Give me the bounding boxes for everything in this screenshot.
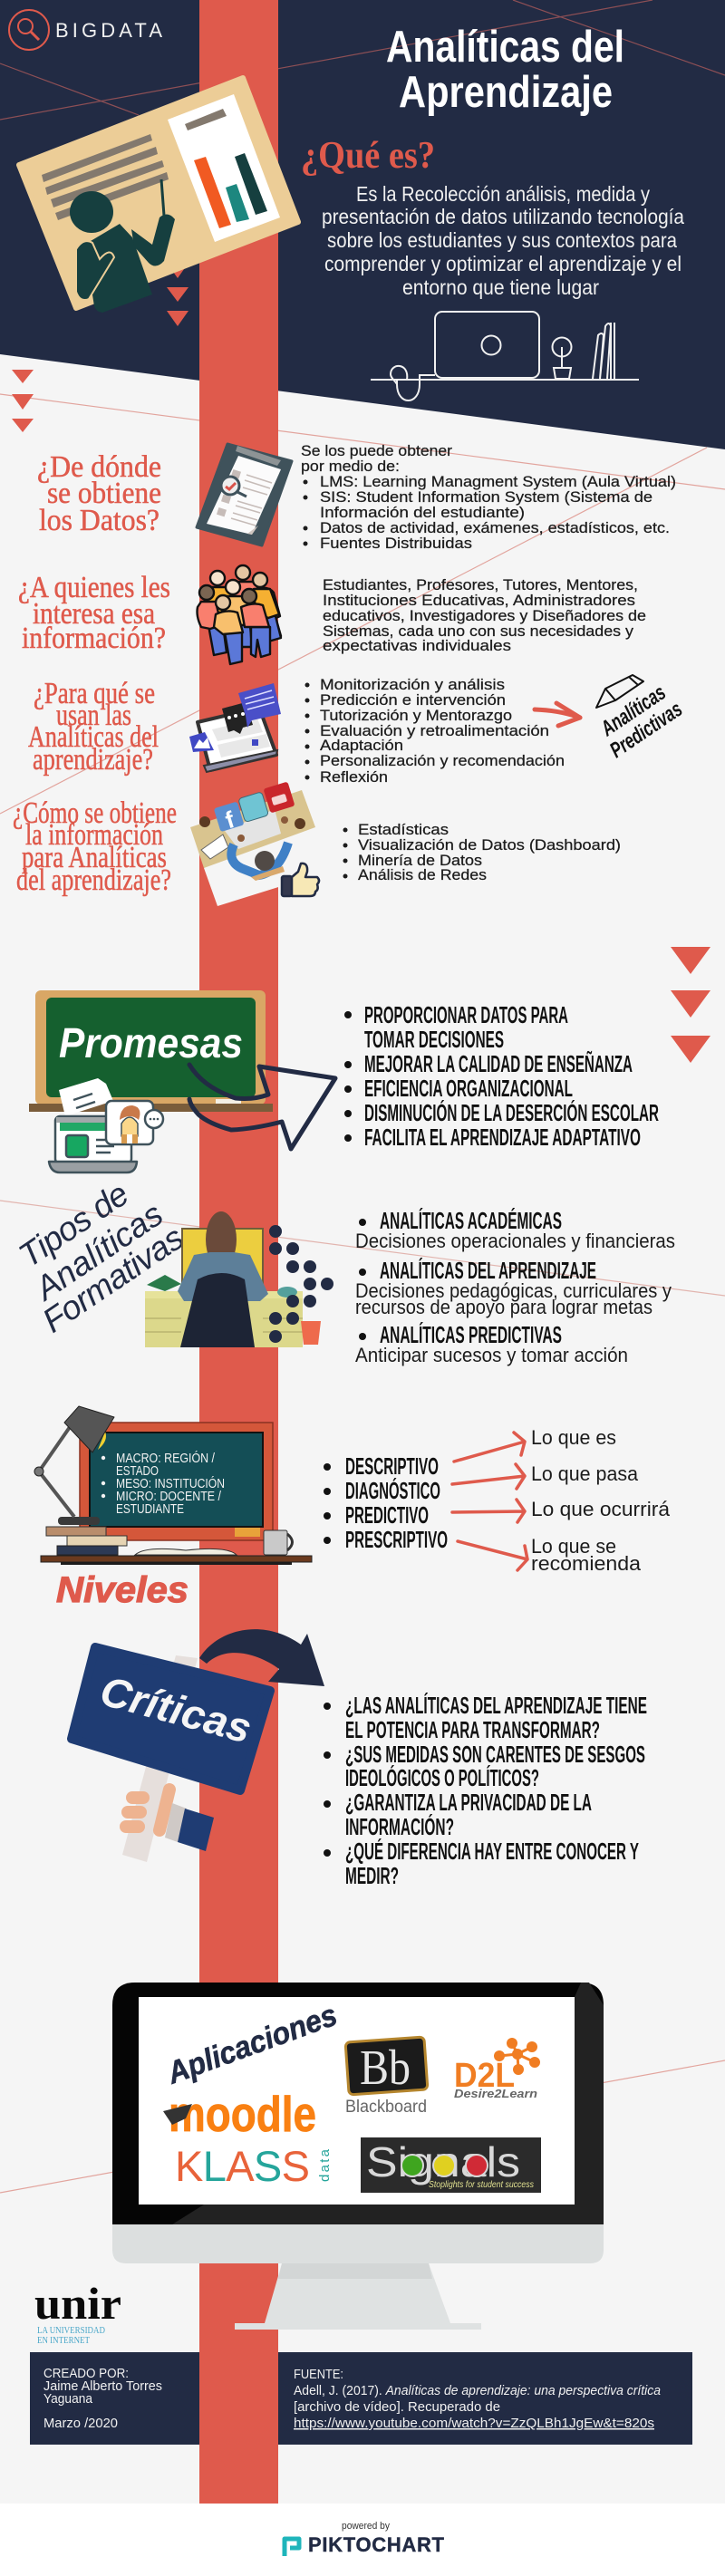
text: interested audiences bbox=[323, 576, 646, 654]
logo: KLASS data: KLASS bbox=[175, 2142, 310, 2190]
logo: D2L bbox=[454, 2038, 540, 2100]
footer: powered by Piktochart: powered by bbox=[342, 2521, 390, 2532]
panel: Promesas chalkboard bbox=[29, 990, 273, 1112]
icon: clipboard bbox=[197, 444, 292, 545]
text: levels: ESTUDIANTE bbox=[116, 1501, 184, 1517]
text: definition: comprender y optimizar el aprendizaje y el bbox=[324, 252, 682, 275]
panel: source citation: [archivo de vídeo]. Recuperado de bbox=[294, 2399, 500, 2415]
logo: D2L: Desire2Learn bbox=[454, 2087, 537, 2100]
list: analytics types: ANALÍTICAS ACADÉMICAS bbox=[380, 1207, 562, 1234]
triangles on navy bbox=[167, 263, 188, 326]
list: promises bbox=[344, 1001, 659, 1151]
text: sources of data bbox=[301, 442, 676, 552]
logo: UNIR: EN INTERNET bbox=[37, 2335, 90, 2346]
logo: KLASS data: data bbox=[317, 2148, 333, 2182]
list: analytics types: recursos de apoyo para lograr metas bbox=[355, 1296, 652, 1318]
text: methods bbox=[343, 821, 621, 883]
heading: ¿De dónde se obtiene los Datos?: los Datos? bbox=[39, 504, 160, 537]
heading: ¿Cómo se obtiene la información?: del aprendizaje? bbox=[16, 863, 171, 897]
logo: Blackboard bbox=[345, 2037, 428, 2117]
icon: laptop and teacher card bbox=[49, 1078, 163, 1172]
panel: source citation: https://www.youtube.com/watch?v=ZzQLBh1JgEw&t=820s bbox=[294, 2416, 654, 2431]
text: uses of analytics: Predicción e intervención bbox=[320, 691, 506, 709]
panel: author credits: Jaime Alberto Torres bbox=[44, 2378, 162, 2394]
list: promises: TOMAR DECISIONES bbox=[364, 1026, 504, 1053]
logo: UNIR: LA UNIVERSIDAD bbox=[37, 2325, 105, 2336]
text: definition bbox=[322, 182, 684, 299]
text: levels bbox=[102, 1451, 225, 1517]
heading: ¿Para qué se usan las Analíticas del aprendizaje?: aprendizaje? bbox=[33, 743, 153, 777]
heading: Aplicaciones: Aplicaciones bbox=[162, 1998, 342, 2091]
logo: moodle: moodle bbox=[169, 2086, 316, 2142]
logo: UNIR: unir bbox=[34, 2278, 121, 2329]
list: analytic levels: DIAGNÓSTICO bbox=[345, 1477, 440, 1504]
icon: pencil bbox=[596, 675, 643, 708]
text: definition: Es la Recolección análisis, medida y bbox=[356, 182, 650, 206]
arrow: to predictive analytics bbox=[535, 703, 580, 726]
icon: line-art desk with laptop bbox=[371, 312, 639, 400]
text: uses of analytics: Tutorización y Mentorazgo bbox=[320, 707, 512, 724]
panel: source citation: Adell, J. (2017). Analíticas de aprendizaje: una perspectiva crítica bbox=[294, 2383, 661, 2398]
list: analytics types bbox=[355, 1207, 675, 1366]
icon: laptop with chat bubbles bbox=[189, 683, 281, 772]
panel: source citation: FUENTE: bbox=[294, 2367, 343, 2382]
text: level outcomes: Lo que se bbox=[531, 1535, 616, 1558]
text: sources of data: Se los puede obtener bbox=[301, 442, 452, 459]
footer: powered by Piktochart bbox=[285, 2521, 445, 2556]
heading: Críticas: Críticas bbox=[95, 1666, 256, 1752]
text: level outcomes: recomienda bbox=[531, 1552, 642, 1575]
panel: author credits: Marzo /2020 bbox=[44, 2416, 118, 2431]
illustration: Niveles blackboard on shelf bbox=[34, 1406, 312, 1565]
list: critical questions bbox=[324, 1692, 647, 1889]
panel: author credits: CREADO POR: bbox=[44, 2366, 129, 2381]
list: analytic levels bbox=[324, 1452, 448, 1553]
list: critical questions: INFORMACIÓN? bbox=[345, 1813, 454, 1840]
text: level outcomes bbox=[531, 1426, 671, 1575]
list: critical questions: MEDIR? bbox=[345, 1862, 399, 1889]
text: level outcomes: Lo que pasa bbox=[531, 1462, 639, 1485]
list: analytics types: Decisiones operacionales y financieras bbox=[355, 1230, 675, 1252]
text: uses of analytics: Adaptación bbox=[320, 737, 403, 754]
heading: Tipos de Analíticas Formativas: Formativas bbox=[36, 1219, 190, 1340]
title bbox=[386, 23, 624, 117]
text: levels: MICRO: DOCENTE / bbox=[116, 1489, 222, 1504]
text: levels: MESO: INSTITUCIÓN bbox=[116, 1476, 225, 1491]
list: analytic levels: DESCRIPTIVO bbox=[345, 1452, 439, 1480]
label: Analíticas Predictivas: Predictivas bbox=[605, 697, 687, 763]
title: Aprendizaje bbox=[399, 68, 613, 117]
text: sources of data: Datos de actividad, exámenes, estadísticos, etc. bbox=[320, 519, 670, 536]
heading: ¿De dónde se obtiene los Datos?: ¿De dónde bbox=[37, 450, 161, 484]
text: levels: ESTADO bbox=[116, 1463, 159, 1479]
text: definition: sobre los estudiantes y sus contextos para bbox=[327, 228, 677, 252]
logo: Signals: Stoplights for student success bbox=[429, 2180, 534, 2190]
panel: source citation bbox=[278, 2352, 692, 2445]
panel: author credits bbox=[30, 2352, 199, 2445]
text: uses of analytics: Personalización y recomendación bbox=[320, 752, 565, 769]
logo: Signals bbox=[361, 2137, 541, 2193]
text: uses of analytics: Evaluación y retroalimentación bbox=[320, 722, 549, 739]
text: levels: MACRO: REGIÓN / bbox=[116, 1451, 216, 1466]
illustration: presenter with board bbox=[19, 78, 298, 313]
text: definition: entorno que tiene lugar bbox=[402, 275, 599, 299]
triangles on light bbox=[12, 370, 34, 432]
footer: powered by Piktochart: PIKTOCHART bbox=[308, 2533, 445, 2556]
text: level outcomes: Lo que es bbox=[531, 1426, 616, 1449]
heading: ¿De dónde se obtiene los Datos?: se obtiene bbox=[47, 477, 161, 510]
heading: ¿Para qué se usan las Analíticas del aprendizaje? bbox=[28, 677, 159, 777]
text: methods: Visualización de Datos (Dashboard) bbox=[358, 836, 621, 854]
text: sources of data: por medio de: bbox=[301, 458, 400, 475]
triangles right bbox=[671, 947, 710, 1063]
heading: ¿A quienes les interesa esa información?: interesa esa bbox=[33, 597, 155, 631]
heading: Tipos de Analíticas Formativas: Analíticas bbox=[27, 1195, 169, 1308]
text: interested audiences: expectativas individuales bbox=[323, 637, 511, 654]
text: definition: presentación de datos utilizando tecnología bbox=[322, 205, 684, 228]
list: analytics types: ANALÍTICAS PREDICTIVAS bbox=[380, 1321, 562, 1348]
arrows: level to outcome bbox=[452, 1433, 527, 1570]
heading: ¿Cómo se obtiene la información?: para Analíticas bbox=[22, 841, 167, 874]
heading: ¿Cómo se obtiene la información? bbox=[13, 796, 177, 897]
logo: D2L: D2L bbox=[454, 2057, 515, 2095]
logo: Signals: Signals bbox=[366, 2138, 520, 2185]
logo: bigdata bbox=[9, 10, 162, 50]
text: uses of analytics bbox=[304, 676, 565, 786]
label: Analíticas Predictivas bbox=[596, 680, 687, 763]
list: critical questions: IDEOLÓGICOS O POLÍTICOS? bbox=[345, 1764, 539, 1791]
text: interested audiences: Sistemas, cada uno con sus necesidades y bbox=[323, 622, 634, 640]
text: uses of analytics: Monitorización y análisis bbox=[320, 676, 505, 693]
heading: Tipos de Analíticas Formativas: Tipos de bbox=[13, 1175, 135, 1275]
list: analytic levels: PRESCRIPTIVO bbox=[345, 1526, 448, 1553]
panel: author credits: Yaguana bbox=[44, 2391, 93, 2407]
title: Analíticas del bbox=[386, 23, 624, 72]
heading: ¿Para qué se usan las Analíticas del aprendizaje?: ¿Para qué se bbox=[34, 677, 155, 710]
text: sources of data: Información del estudiante) bbox=[320, 504, 525, 521]
heading: ¿Qué es?: ¿Qué es? bbox=[301, 135, 435, 177]
text: level outcomes: Lo que ocurrirá bbox=[531, 1498, 671, 1520]
text: sources of data: LMS: Learning Managment System (Aula Virtual) bbox=[320, 473, 676, 490]
illustration: desktop monitor bbox=[112, 1983, 604, 2330]
heading: ¿Para qué se usan las Analíticas del aprendizaje?: usan las bbox=[56, 699, 131, 732]
icon: group of people bbox=[198, 565, 281, 664]
text: interested audiences: educativos, Investigadores y Diseñadores de bbox=[323, 607, 646, 624]
logo: bigdata: BIGDATA bbox=[55, 19, 162, 42]
text: sources of data: SIS: Student Information System (Sistema de bbox=[320, 488, 652, 506]
illustration: desk with social media bbox=[190, 782, 319, 906]
heading: ¿Para qué se usan las Analíticas del aprendizaje?: Analíticas del bbox=[28, 720, 159, 754]
heading: ¿A quienes les interesa esa información?: ¿A quienes les bbox=[18, 571, 170, 604]
arrow: doodle pointer to promises bbox=[189, 1065, 335, 1149]
text: interested audiences: Instituciones Educativas, Administradores bbox=[323, 592, 635, 609]
icon: thumbs up bbox=[282, 863, 319, 896]
list: analytics types: Decisiones pedagógicas, curriculares y bbox=[355, 1279, 672, 1302]
heading: ¿A quienes les interesa esa información?: información? bbox=[22, 622, 166, 655]
text: uses of analytics: Reflexión bbox=[320, 768, 388, 786]
central red strip bbox=[199, 0, 278, 2504]
logo: Blackboard: Blackboard bbox=[345, 2098, 427, 2117]
text: sources of data: Fuentes Distribuidas bbox=[320, 535, 472, 552]
illustration: Críticas sign and hand bbox=[72, 1647, 270, 1862]
arrow: curved to criticisms bbox=[199, 1629, 324, 1686]
heading: ¿De dónde se obtiene los Datos? bbox=[37, 450, 161, 537]
text: methods: Análisis de Redes bbox=[358, 866, 487, 883]
illustration: desk with social media: f bbox=[222, 806, 237, 834]
list: analytics types: Anticipar sucesos y tomar acción bbox=[355, 1344, 628, 1366]
text: methods: Estadísticas bbox=[358, 821, 449, 838]
list: analytic levels: PREDICTIVO bbox=[345, 1501, 429, 1529]
text: methods: Minería de Datos bbox=[358, 852, 482, 869]
list: promises: EFICIENCIA ORGANIZACIONAL bbox=[364, 1075, 573, 1102]
footer white band bbox=[0, 2504, 725, 2576]
heading: Niveles: Niveles bbox=[56, 1570, 188, 1610]
illustration: person at desk bbox=[145, 1211, 334, 1347]
heading: ¿A quienes les interesa esa información? bbox=[18, 571, 170, 655]
list: promises: PROPORCIONAR DATOS PARA bbox=[364, 1001, 568, 1028]
heading: ¿Cómo se obtiene la información?: la información bbox=[25, 818, 163, 852]
logo: Blackboard: Bb bbox=[360, 2040, 411, 2095]
panel: applications screen bbox=[139, 1997, 575, 2205]
heading: Tipos de Analíticas Formativas bbox=[13, 1175, 190, 1340]
heading: Promesas: Promesas bbox=[59, 1019, 243, 1066]
label: Analíticas Predictivas: Analíticas bbox=[596, 680, 671, 741]
text: interested audiences: Estudiantes, Profesores, Tutores, Mentores, bbox=[323, 576, 638, 593]
heading: ¿Cómo se obtiene la información?: ¿Cómo se obtiene bbox=[13, 796, 177, 830]
